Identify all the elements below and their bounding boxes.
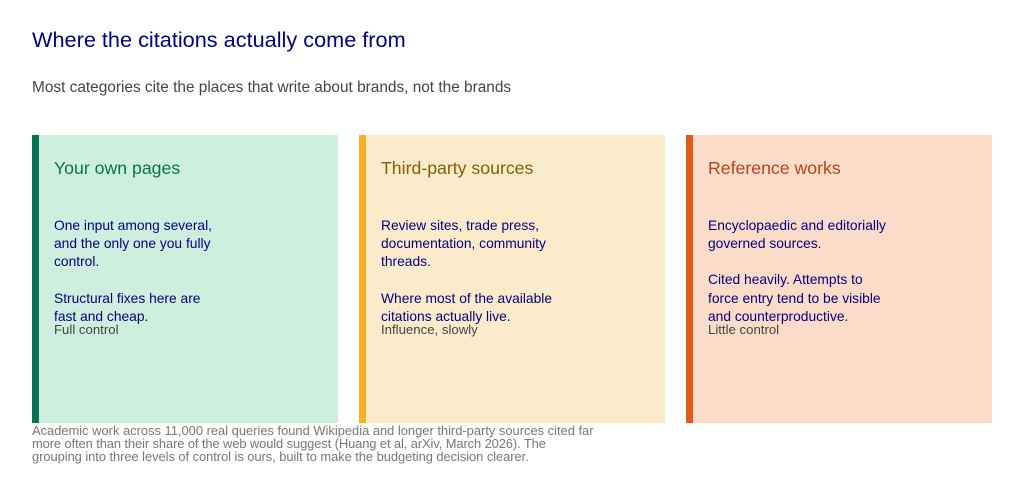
panel: third-party sources: citations actually live. — [381, 309, 511, 324]
panel: your own pages: Structural fixes here are — [54, 291, 200, 306]
panel: third-party sources: Third-party sources — [381, 158, 533, 178]
title: Where the citations actually come from — [32, 27, 406, 52]
panel: reference works — [686, 135, 992, 423]
subtitle: Most categories cite the places that write about brands, not the brands — [32, 79, 511, 96]
panel: third-party sources: threads. — [381, 254, 431, 269]
panel: reference works: force entry tend to be visible — [708, 291, 881, 306]
panel: third-party sources: Influence, slowly — [381, 322, 478, 337]
panel: reference works: and counterproductive. — [708, 309, 848, 324]
panel: third-party sources: Where most of the available — [381, 291, 552, 306]
panel: reference works: Little control — [708, 322, 779, 337]
panel: reference works: Cited heavily. Attempts to — [708, 272, 863, 287]
panel: reference works: Reference works — [708, 158, 841, 178]
panel: your own pages: fast and cheap. — [54, 309, 148, 324]
panel: your own pages: Full control — [54, 322, 118, 337]
panel: your own pages: One input among several, — [54, 218, 212, 232]
footnote: Academic work across 11,000 real queries found Wikipedia and longer third-party sources cited far — [32, 423, 594, 438]
panel: reference works: governed sources. — [708, 236, 822, 251]
panel: your own pages: control. — [54, 254, 99, 269]
panel: your own pages: Your own pages — [54, 158, 180, 178]
footnote: grouping into three levels of control is ours, built to make the budgeting decision clearer. — [32, 449, 529, 464]
panel: third-party sources — [359, 135, 665, 423]
panel: your own pages: and the only one you fully — [54, 236, 210, 251]
panel: reference works: Encyclopaedic and editorially — [708, 218, 886, 232]
panel: third-party sources: Review sites, trade press, — [381, 218, 539, 232]
panel: third-party sources: documentation, community — [381, 236, 546, 251]
footnote: more often than their share of the web would suggest (Huang et al, arXiv, March 2026). The — [32, 436, 546, 451]
footnote — [32, 423, 594, 464]
panel: your own pages — [32, 135, 338, 423]
